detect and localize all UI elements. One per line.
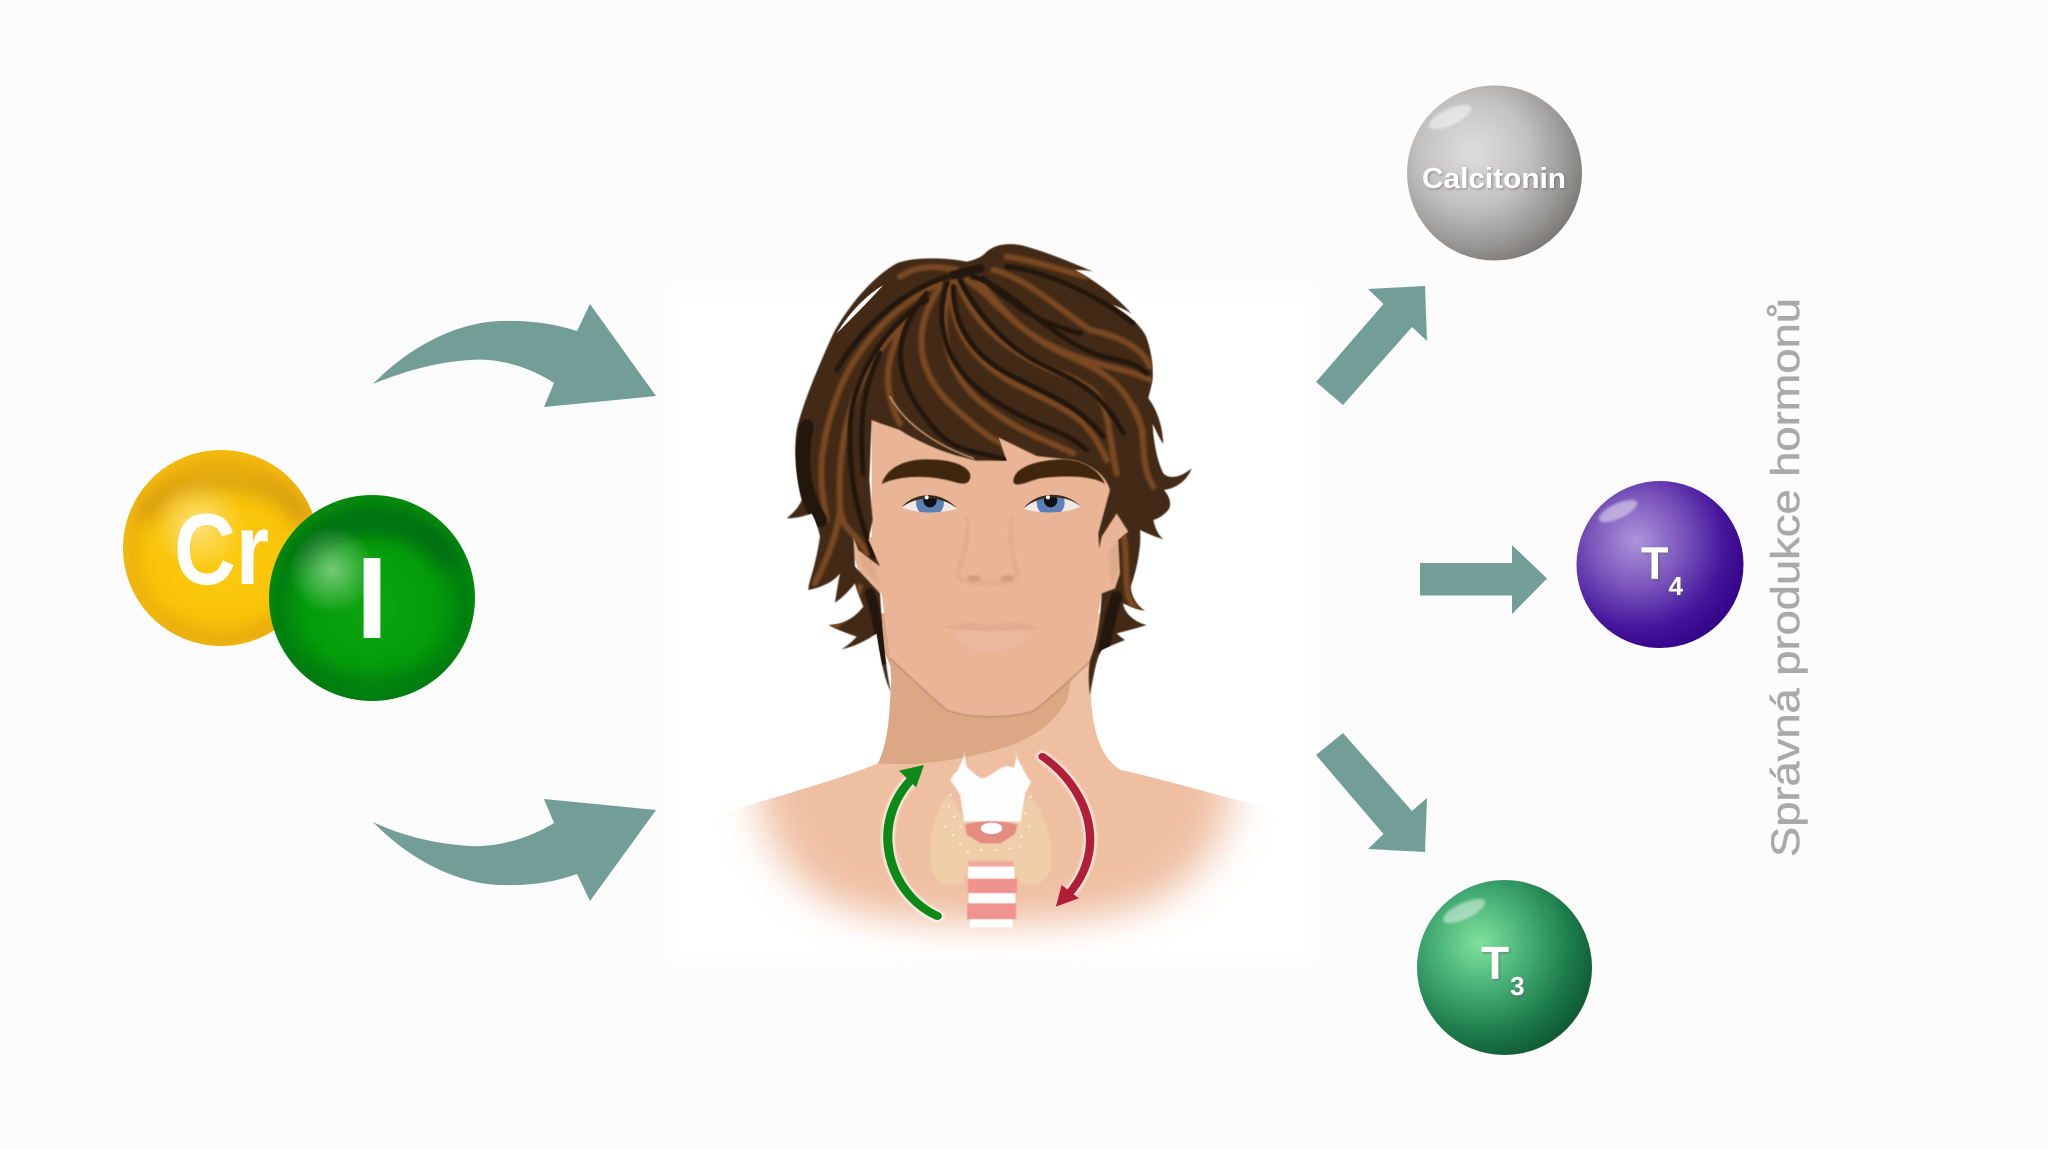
- icon: chromium sphere: [123, 450, 319, 646]
- left eye: [902, 495, 958, 512]
- label: T3: 3: [1510, 971, 1525, 1001]
- arrow: to calcitonin: [1316, 286, 1427, 405]
- label: Cr: Cr: [174, 494, 269, 606]
- right eye: [1024, 494, 1080, 512]
- thyroid lobes: [930, 793, 1051, 886]
- dots on lobes: [944, 794, 1032, 853]
- icon: T4 sphere: [1576, 481, 1744, 648]
- arrow: curved bottom: [373, 799, 656, 901]
- arrow: red down: [1043, 757, 1090, 907]
- label: T4: T: [1641, 538, 1668, 589]
- infographic: thyroid hormone production: [123, 86, 1808, 1055]
- icon: calcitonin sphere: [1407, 86, 1582, 260]
- face: [787, 244, 1192, 717]
- thyroid gland: [888, 748, 1090, 927]
- cricoid cartilage: [965, 821, 1018, 843]
- nose: [957, 517, 1017, 583]
- ear shading: [858, 540, 1120, 587]
- arrow: to T3: [1316, 733, 1427, 852]
- vertical caption: Správná produkce hormonů: [1764, 298, 1808, 857]
- arrow: to T4: [1420, 545, 1547, 614]
- icon: T3 sphere: [1417, 880, 1592, 1055]
- label: I: I: [356, 533, 388, 663]
- arrow: curved top: [373, 304, 656, 407]
- icon: iodine sphere: [269, 495, 475, 701]
- label: T3: T: [1481, 937, 1509, 989]
- label: Calcitonin: Calcitonin: [1422, 163, 1566, 195]
- neck and shoulders: [757, 540, 1232, 924]
- eyebrows: [882, 459, 1105, 485]
- figure: man with thyroid: [757, 244, 1232, 927]
- larynx: [951, 748, 1031, 822]
- hair: [787, 244, 1192, 695]
- mouth: [944, 623, 1038, 651]
- label: T4: 4: [1668, 571, 1684, 601]
- arrow: green up: [888, 765, 937, 916]
- trachea: [967, 862, 1017, 927]
